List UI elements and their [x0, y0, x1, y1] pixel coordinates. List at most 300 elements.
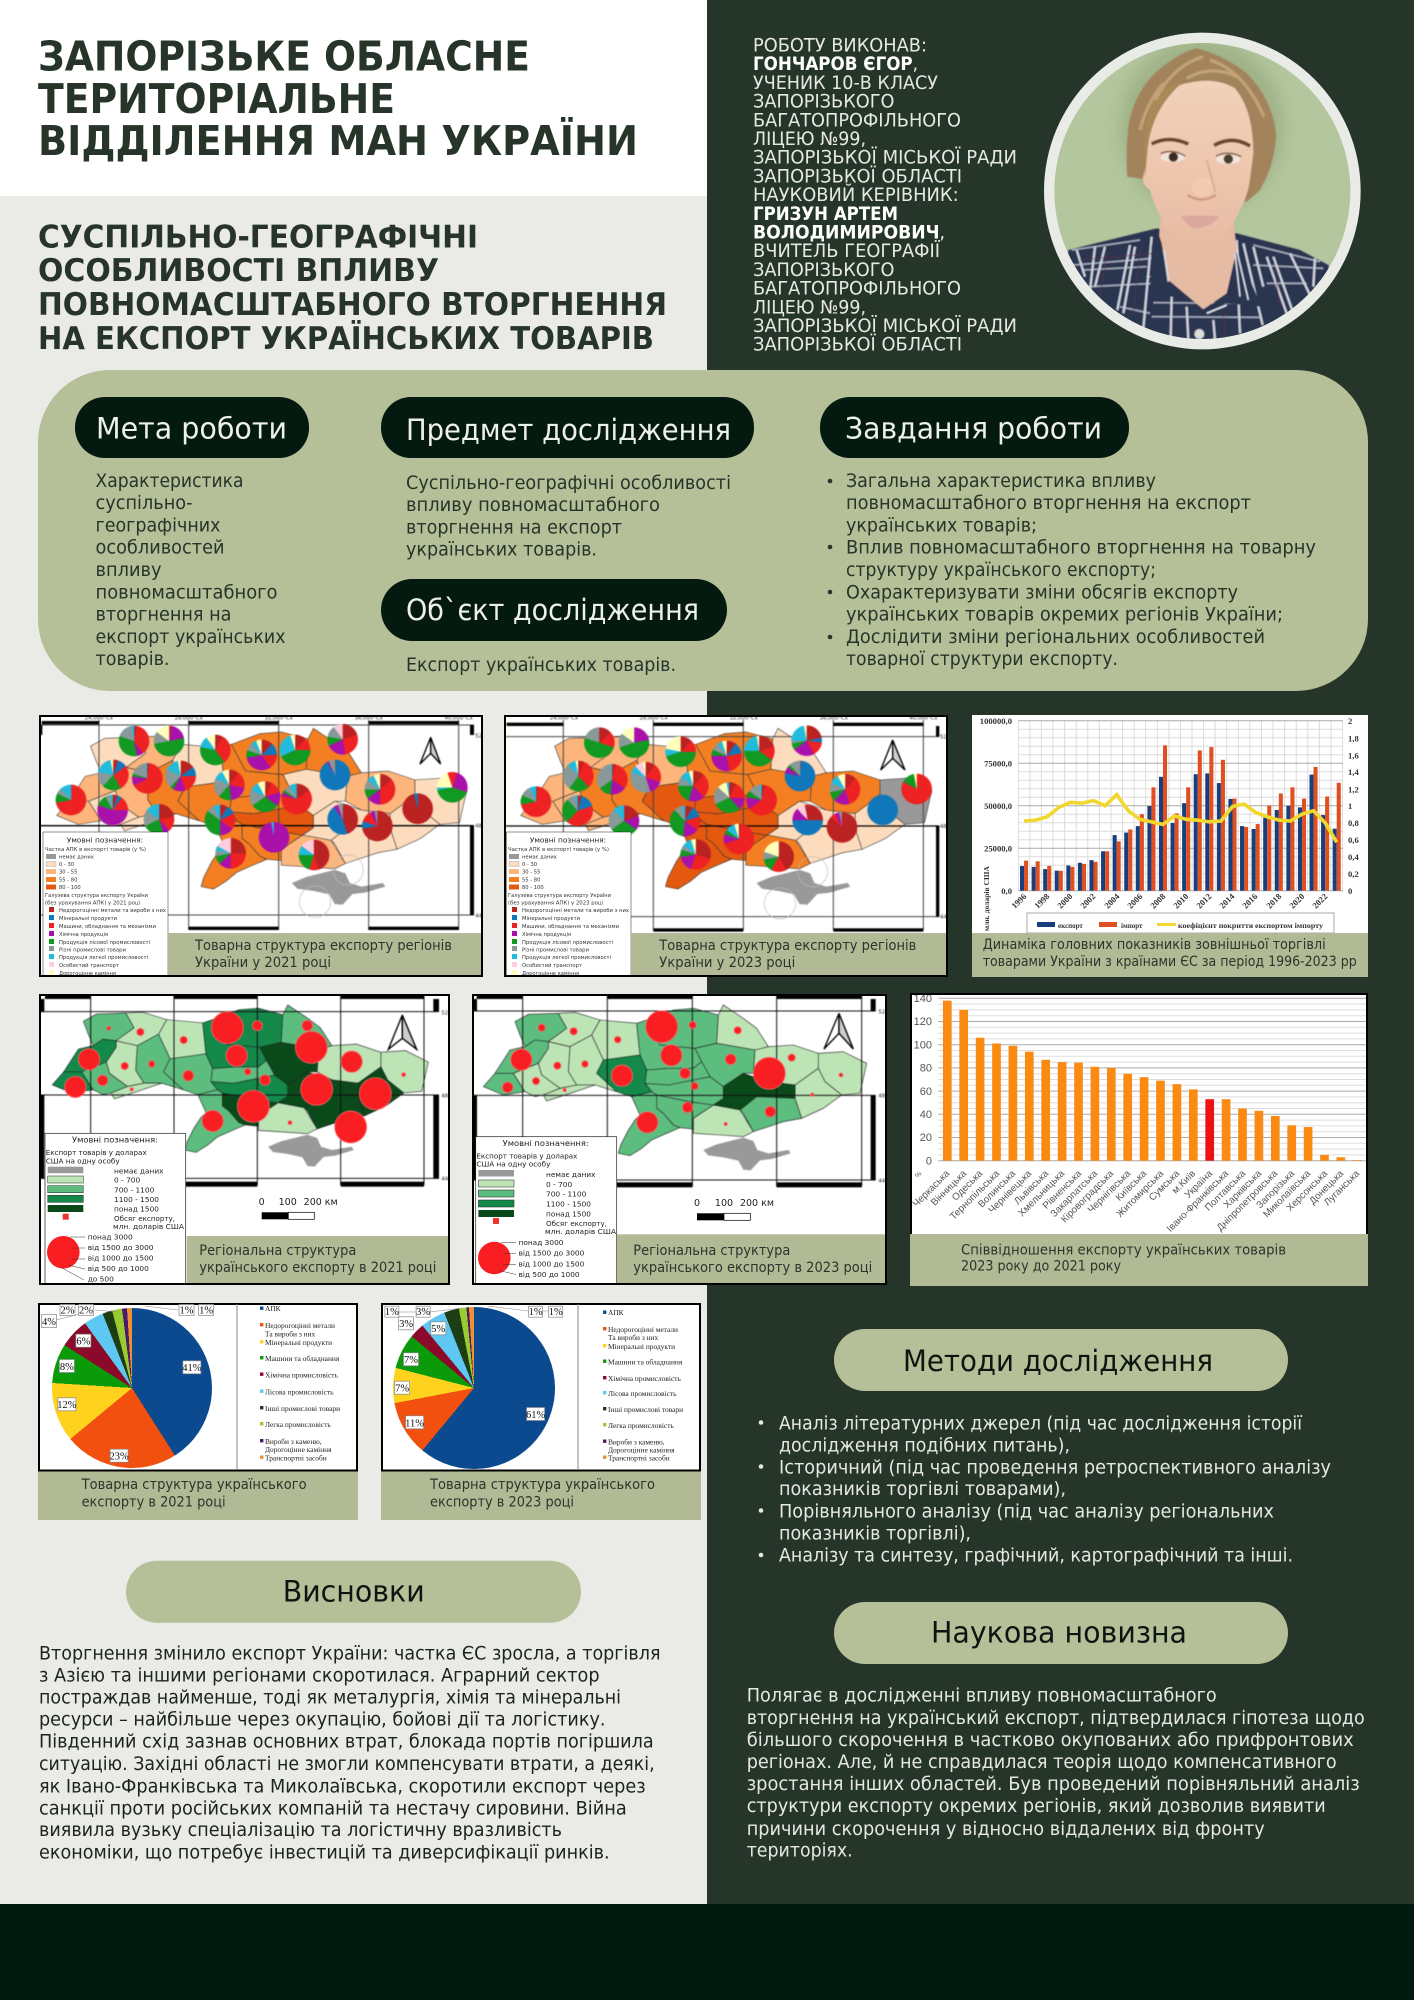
data labels 2023: 11%	[405, 1418, 424, 1430]
text: aim description: особливостей	[96, 536, 224, 558]
legend 2023: Інші промислові товари	[608, 1405, 683, 1414]
legend 2021: Хімічна промисловість	[265, 1370, 338, 1380]
legend 2023: Транспортні засоби	[608, 1454, 670, 1462]
data labels 2021: 2%	[60, 1306, 75, 1316]
text block: conclusions: постраждав найменше, тоді як металургія, хімія та мінеральні	[39, 1686, 621, 1708]
legend: map 2021: Машини, обладнання та механізми	[59, 924, 156, 930]
text: aim description	[96, 470, 286, 670]
data labels 2023: 1%	[529, 1307, 543, 1318]
chart: EU trade dynamics 1996-2023: 0,8	[1348, 818, 1359, 828]
chart: export 2023 vs 2021 by region: 120	[914, 1016, 932, 1028]
legend: export 2021: від 1500 до 3000	[88, 1243, 154, 1252]
legend: export 2023: Експорт товарів у доларах	[476, 1152, 578, 1160]
chart: EU trade dynamics 1996-2023: 2012	[1194, 891, 1213, 911]
text block: scientific novelty: регіонах. Але, й не справдилася теорія щодо компенсативного	[747, 1751, 1337, 1773]
caption: map 2023: Регіональна структура	[633, 1243, 790, 1259]
legend: export 2023: понад 1500	[546, 1210, 591, 1218]
text: subject description: Суспільно-географічні особливості	[406, 472, 731, 494]
legend: map 2023: (без урахування АПК) у 2023 році	[508, 900, 603, 906]
chart: EU trade dynamics 1996-2023: 2004	[1102, 891, 1122, 911]
bars: import	[1024, 745, 1341, 891]
data labels 2023: 7%	[404, 1355, 418, 1366]
legend: export 2023: 0 - 700	[546, 1180, 572, 1189]
legend 2023: Машини та обладнання	[608, 1358, 683, 1366]
text block: authors: БАГАТОПРОФІЛЬНОГО	[753, 110, 961, 131]
legend: export 2023: США на одну особу	[476, 1160, 551, 1169]
list: tasks: Охарактеризувати зміни обсягів експорту	[846, 582, 1238, 604]
chart: export 2023 vs 2021 by region: 140	[914, 993, 932, 1005]
legend 2021: Мінеральні продукти	[265, 1338, 332, 1347]
text: object description: Експорт українських товарів.	[406, 654, 676, 676]
text: subject description: вторгнення на експорт	[406, 516, 622, 538]
legend: trade chart: експорт	[1058, 922, 1083, 930]
map: export structure of regions 2021: 44	[475, 913, 483, 919]
caption: pie 2023: експорту в 2023 році	[430, 1494, 574, 1510]
chart: EU trade dynamics 1996-2023: 50000,0	[984, 801, 1012, 811]
caption: map 2023	[617, 1234, 887, 1284]
chart: export 2023 vs 2021 by region	[910, 993, 1368, 1286]
scale bar 2021: 0	[259, 1197, 265, 1208]
map: export structure of regions 2023: 48	[940, 824, 947, 830]
legend: map 2021: Дорогоцінне каміння	[59, 971, 116, 977]
legend: export 2023: понад 3000	[518, 1238, 564, 1247]
legend 2023: Легка промисловість	[608, 1421, 674, 1430]
chart: export 2023 vs 2021 by region: Сумська	[1147, 1168, 1183, 1203]
chart: export 2023 vs 2021 by region: Миколаївська	[1261, 1168, 1314, 1220]
legend: export 2023: від 500 до 1000	[518, 1270, 580, 1279]
map: export structure of regions 2021: 24,000°Сх	[85, 715, 113, 721]
legend: map 2021: 80 - 100	[59, 885, 81, 891]
list: methods: показників торгівлі),	[779, 1522, 971, 1544]
list: methods	[758, 1412, 1331, 1567]
legend 2023: Та вироби з них	[608, 1333, 659, 1342]
data labels 2023: 1%	[385, 1307, 399, 1318]
legend: map 2021: Галузева структура експорту України	[45, 893, 148, 899]
data labels 2021: 8%	[60, 1362, 74, 1373]
caption: bar chart	[910, 1234, 1368, 1286]
legend: export 2021: від 1000 до 1500	[88, 1254, 154, 1263]
map: regional export 2021	[39, 994, 450, 1285]
text block: authors: ЗАПОРІЗЬКОГО	[753, 92, 894, 113]
chart: EU trade dynamics 1996-2023: 2018	[1264, 891, 1284, 911]
chart: export 2023 vs 2021 by region: Черкаська	[911, 1168, 953, 1210]
text: aim description: повномасштабного	[96, 582, 278, 604]
chart: export 2023 vs 2021 by region: Івано-Франківська	[1165, 1168, 1232, 1235]
text block: conclusions: як Івано-Франківська та Миколаївська, скоротили експорт через	[39, 1775, 646, 1797]
chart: commodity pie 2021	[38, 1303, 358, 1520]
list: tasks: українських товарів;	[846, 514, 1037, 536]
chart: export 2023 vs 2021 by region: Вінницька	[929, 1168, 970, 1208]
data labels 2021: 1%	[199, 1306, 213, 1316]
legend: map 2021	[43, 832, 168, 977]
text: subject description: впливу повномасштабного	[406, 494, 660, 516]
legend: trade chart: коефіцієнт покриття експортом імпорту	[1178, 922, 1324, 930]
chart: EU trade dynamics 1996-2023: млн. доларів США	[982, 866, 991, 931]
data labels 2023: 3%	[399, 1319, 413, 1330]
chart: EU trade dynamics 1996-2023: 100000,0	[980, 716, 1012, 726]
legend 2021: Вироби з каменю,	[265, 1437, 322, 1446]
list: tasks: Вплив повномасштабного вторгнення на товарну	[846, 536, 1316, 558]
text block: authors: ВОЛОДИМИРОВИЧ,	[753, 222, 945, 244]
legend: export 2021: 0 - 700	[114, 1176, 140, 1185]
legend: map 2023: 55 - 80	[522, 878, 540, 884]
data labels 2023: 5%	[431, 1324, 446, 1335]
pill: object: Об`єкт дослідження	[406, 593, 699, 627]
chart: EU trade dynamics 1996-2023: 1,8	[1348, 734, 1359, 744]
chart: export 2023 vs 2021 by region: Київська	[1114, 1168, 1150, 1204]
text block: scientific novelty: причини скорочення у відносно віддалених від фронту	[747, 1818, 1265, 1840]
text: aim description: товарів.	[96, 648, 170, 670]
list: methods: Порівняльного аналізу (під час аналізу регіональних	[779, 1500, 1274, 1522]
legend: map 2021: 0 - 30	[59, 862, 74, 868]
pill: tasks	[820, 397, 1129, 458]
legend: export 2021: немає даних	[114, 1166, 164, 1175]
caption: map 2021: Товарна структура експорту регіонів	[194, 938, 452, 954]
legend 2023: Дорогоцінне каміння	[608, 1446, 675, 1454]
legend: export 2021: 700 - 1100	[114, 1185, 155, 1194]
text: aim description: вторгнення на	[96, 604, 232, 626]
map: export structure of regions 2021	[39, 715, 483, 977]
chart: export 2023 vs 2021 by region: Чернігівська	[1086, 1168, 1134, 1216]
list: tasks	[828, 470, 1316, 670]
legend: map 2023: Машини, обладнання та механізми	[522, 924, 619, 930]
map: regional export 2023	[472, 994, 887, 1285]
legend: map 2021: 55 - 80	[59, 878, 77, 884]
caption: bar chart: Співвідношення експорту українських товарів	[961, 1242, 1286, 1258]
legend: export 2023: млн. доларів США	[545, 1227, 616, 1236]
chart: export 2023 vs 2021 by region: Дніпропетровська	[1215, 1168, 1281, 1234]
map: export structure of regions 2023: 44	[940, 915, 947, 921]
legend: export 2021: 1100 - 1500	[114, 1195, 159, 1204]
legend: map 2023: Продукція легкої промисловості	[522, 955, 611, 961]
legend 2023	[603, 1308, 683, 1462]
legend: export 2021: до 500	[88, 1275, 114, 1284]
map: export structure of regions 2021: 40,000°Сх	[445, 715, 473, 721]
heading: research topic: СУСПІЛЬНО-ГЕОГРАФІЧНІ	[38, 220, 478, 256]
legend: map 2023: Недорогоцінні метали та вироби з них	[522, 908, 629, 914]
legend 2023: АПК	[608, 1308, 624, 1317]
text block: conclusions: виявила вузьку спеціалізацію та логістичну вразливість	[39, 1819, 562, 1841]
text block: scientific novelty: Полягає в дослідженні впливу повномасштабного	[747, 1685, 1217, 1707]
chart: EU trade dynamics 1996-2023: 2016	[1240, 891, 1260, 911]
background: white header block	[0, 0, 707, 196]
legend: export 2023	[476, 1137, 617, 1284]
text block: authors: ЗАПОРІЗЬКОЇ ОБЛАСТІ	[753, 335, 962, 356]
legend: export 2023: немає даних	[546, 1170, 596, 1179]
legend: map 2021: Недорогоцінні метали та вироби з них	[59, 908, 166, 914]
data labels 2021: 23%	[109, 1452, 129, 1462]
line: coverage coefficient	[1024, 795, 1337, 842]
chart: export 2023 vs 2021 by region: Львівська	[1012, 1168, 1052, 1207]
chart: EU trade dynamics 1996-2023: 2006	[1125, 891, 1145, 911]
list: methods: дослідження подібних питань),	[779, 1434, 1070, 1456]
pie charts on 2021 map	[54, 723, 468, 872]
legend: map 2023: Різні промислові товари	[522, 948, 589, 954]
legend 2021: Та вироби з них	[265, 1330, 316, 1338]
legend: trade chart: імпорт	[1121, 922, 1143, 930]
chart: EU trade dynamics 1996-2023: 0	[1348, 886, 1352, 896]
chart: EU trade dynamics 1996-2023: 1,4	[1348, 767, 1359, 777]
caption: pie 2023	[429, 1477, 655, 1510]
pill: tasks: Завдання роботи	[845, 412, 1102, 446]
data labels 2021: 1%	[180, 1306, 194, 1316]
legend: map 2023: 30 - 55	[522, 870, 540, 876]
scale bar 2023: 100	[715, 1198, 733, 1209]
chart: export 2023 vs 2021 by region: Луганська	[1322, 1168, 1363, 1208]
legend: map 2023: 0 - 30	[522, 862, 537, 868]
map: export structure of regions 2021: 48	[475, 823, 483, 829]
text block: authors: РОБОТУ ВИКОНАВ:	[753, 36, 927, 56]
caption: bar chart: 2023 року до 2021 року	[961, 1259, 1121, 1275]
text block: conclusions: з Азією та іншими регіонами скоротилася. Аграрний сектор	[39, 1665, 600, 1687]
caption: map 2021: України у 2021 році	[195, 955, 331, 971]
caption: map 2021	[187, 1236, 450, 1285]
legend: map 2023: Мінеральні продукти	[522, 916, 580, 922]
map: export structure of regions 2021: 36,000°Сх	[355, 715, 383, 721]
chart: EU trade dynamics 1996-2023: 2002	[1078, 891, 1097, 911]
chart: export 2023 vs 2021 by region: %	[914, 1170, 923, 1180]
map: export structure of regions 2021: 32,000°Сх	[265, 715, 293, 721]
chart: export 2023 vs 2021 by region: Полтавська	[1203, 1168, 1249, 1214]
text: subject description	[406, 472, 731, 560]
legend: map 2023: Особистий транспорт	[522, 962, 582, 969]
list: tasks: українських товарів окремих регіонів України;	[846, 604, 1283, 626]
legend 2021: Транспортні засоби	[265, 1454, 327, 1462]
list: methods: показників торгівлі товарами),	[779, 1478, 1066, 1500]
legend 2023: Лісова промисловість	[608, 1389, 677, 1398]
heading: conclusions: Висновки	[283, 1575, 425, 1609]
text block: authors: ЗАПОРІЗЬКОЇ МІСЬКОЇ РАДИ	[753, 316, 1017, 337]
data labels 2023	[385, 1306, 563, 1430]
background: dark bottom band	[0, 1904, 1414, 2000]
data labels 2021: 6%	[76, 1336, 91, 1348]
list: methods: Аналіз літературних джерел (під час дослідження історії	[779, 1412, 1303, 1434]
caption: map 2023: Товарна структура експорту регіонів	[658, 938, 916, 954]
legend: map 2023: 80 - 100	[522, 885, 544, 891]
text block: scientific novelty: територіях.	[747, 1840, 853, 1862]
legend: export 2021: понад 3000	[88, 1232, 133, 1241]
text: aim description: експорт українських	[96, 626, 286, 648]
heading: methods: Методи дослідження	[903, 1344, 1213, 1378]
text block: authors: ВЧИТЕЛЬ ГЕОГРАФІЇ	[753, 241, 941, 262]
map: export structure of regions 2023	[504, 715, 948, 977]
pill: subject: Предмет дослідження	[406, 413, 731, 447]
title: organisation heading: ЗАПОРІЗЬКЕ ОБЛАСНЕ	[38, 32, 530, 80]
text block: authors	[753, 36, 1017, 356]
list: tasks: повномасштабного вторгнення на експорт	[846, 492, 1251, 514]
chart: export 2023 vs 2021 by region: Кіровоградська	[1059, 1168, 1117, 1225]
map: regional export 2023: 52	[878, 1010, 885, 1016]
chart: EU trade dynamics 1996-2023: 0,4	[1348, 852, 1359, 862]
pill: object	[381, 579, 727, 641]
background: dark right column	[707, 0, 1414, 1904]
legend: export 2021: США на одну особу	[46, 1156, 120, 1165]
scale bar 2021	[259, 1197, 338, 1219]
chart: EU trade dynamics 1996-2023: 0,0	[1001, 886, 1012, 896]
map: export structure of regions 2023: 28,000°Сх	[640, 715, 668, 721]
chart: export 2023 vs 2021 by region: Херсонська	[1285, 1168, 1331, 1214]
text block: authors: ГОНЧАРОВ ЄГОР,	[753, 54, 918, 75]
data labels 2023: 3%	[416, 1307, 430, 1318]
bars: regions	[943, 1001, 1362, 1161]
text: aim description: суспільно-	[96, 492, 192, 514]
caption: pie 2021: Товарна структура українського	[81, 1477, 307, 1493]
caption: pie 2021: експорту в 2021 році	[82, 1494, 226, 1510]
legend: export 2021: понад 1500	[114, 1205, 159, 1214]
data labels 2023: 61%	[526, 1410, 545, 1421]
map: export structure of regions 2021: 52	[475, 733, 482, 739]
chart: export 2023 vs 2021 by region: 40	[920, 1109, 932, 1121]
chart: EU trade dynamics 1996-2023: 0,2	[1348, 869, 1359, 879]
chart: export 2023 vs 2021 by region: Тернопільська	[948, 1168, 1003, 1222]
text block: authors: ЗАПОРІЗЬКОЇ МІСЬКОЇ РАДИ	[753, 148, 1017, 169]
legend 2021: Недорогоцінні метали	[265, 1321, 335, 1330]
text block: conclusions: економіки, що потребує інвестицій та диверсифікації ринків.	[39, 1841, 610, 1863]
chart: export 2023 vs 2021 by region: 100	[914, 1040, 932, 1052]
chart: EU trade dynamics 1996-2023	[972, 715, 1368, 977]
legend: map 2021: Продукція лісової промисловості	[59, 940, 150, 946]
text block: authors: ЗАПОРІЗЬКОГО	[753, 260, 894, 281]
caption: pie 2021	[81, 1477, 307, 1510]
map: export structure of regions 2023: 36,000°Сх	[820, 715, 848, 721]
legend: export 2021: від 500 до 1000	[88, 1264, 149, 1273]
legend: map 2023: Дорогоцінне каміння	[522, 971, 579, 977]
legend: map 2023: Галузева структура експорту України	[508, 893, 611, 899]
text block: conclusions: ресурси – найбільше через окупацію, бойові дії та логістику.	[39, 1708, 606, 1730]
chart: EU trade dynamics 1996-2023: 2000	[1055, 891, 1074, 911]
legend 2021: Машини та обладнання	[265, 1354, 340, 1363]
heading: research topic: ПОВНОМАСШТАБНОГО ВТОРГНЕННЯ	[38, 287, 667, 323]
legend: map 2021: Особистий транспорт	[59, 962, 119, 969]
legend: map 2021: Продукція легкої промисловості	[59, 955, 148, 961]
list: methods: Аналізу та синтезу, графічний, картографічний та інші.	[779, 1545, 1293, 1567]
legend: map 2021: Мінеральні продукти	[59, 916, 117, 922]
chart: EU trade dynamics 1996-2023: 2	[1348, 716, 1352, 726]
scale bar 2023: 0	[694, 1198, 700, 1209]
caption: map 2021	[168, 933, 483, 977]
legend: map 2023: немає даних	[522, 854, 557, 860]
list: tasks: Дослідити зміни регіональних особливостей	[846, 626, 1265, 648]
data labels 2021: 2%	[79, 1306, 93, 1316]
legend: export 2021: млн. доларів США	[113, 1222, 184, 1231]
map: export structure of regions 2023: 32,000°Сх	[730, 715, 758, 721]
text block: scientific novelty: структури експорту окремих регіонів, який дозволив виявити	[747, 1795, 1326, 1817]
data labels 2021: 4%	[42, 1317, 56, 1328]
legend: map 2023: Умовні позначення:	[530, 836, 606, 844]
legend: export 2021: Умовні позначення:	[72, 1136, 158, 1145]
text: aim description: географічних	[96, 514, 220, 536]
text: subject description: українських товарів.	[406, 538, 597, 560]
caption: pie 2023: Товарна структура українського	[429, 1477, 655, 1493]
map: export structure of regions 2023: 24,000°Сх	[550, 715, 578, 721]
chart: EU trade dynamics 1996-2023: 1996	[1009, 891, 1029, 911]
caption: trade chart: Динаміка головних показників зовнішньої торгівлі	[983, 937, 1326, 953]
text block: authors: ЗАПОРІЗЬКОЇ ОБЛАСТІ	[753, 166, 962, 187]
chart: export 2023 vs 2021 by region: 60	[920, 1086, 932, 1098]
map: export structure of regions 2023: 40,000°Сх	[909, 715, 937, 721]
legend: export 2021: Обсяг експорту,	[114, 1214, 175, 1223]
scale bar 2023	[694, 1198, 774, 1220]
chart: EU trade dynamics 1996-2023: 2020	[1287, 891, 1306, 911]
heading: scientific novelty: Наукова новизна	[931, 1616, 1187, 1650]
chart: export 2023 vs 2021 by region: м.Київ	[1170, 1168, 1198, 1196]
title: organisation heading: ТЕРИТОРІАЛЬНЕ	[38, 75, 395, 123]
text: aim description: впливу	[96, 559, 162, 581]
map: regional export 2021: 48	[441, 1093, 449, 1099]
chart: export 2023 vs 2021 by region: Донецька	[1307, 1168, 1347, 1207]
text block: authors: БАГАТОПРОФІЛЬНОГО	[753, 279, 961, 300]
legend: map 2021: Частка АПК в експорті товарів (у %)	[45, 847, 146, 853]
list: tasks: товарної структури експорту.	[846, 648, 1118, 670]
panel: goals and tasks	[38, 370, 1368, 691]
data labels 2023: 7%	[395, 1384, 409, 1394]
heading: research topic: ОСОБЛИВОСТІ ВПЛИВУ	[38, 253, 439, 289]
map: regional export 2021: 44	[441, 1176, 449, 1182]
legend 2021: Легка промисловість	[265, 1420, 331, 1429]
legend: map 2023	[506, 832, 631, 977]
text block: authors: ЛІЦЕЮ №99,	[753, 297, 866, 318]
chart: export 2023 vs 2021 by region: Житомирська	[1115, 1168, 1167, 1220]
legend: map 2023: Частка АПК в експорті товарів (у %)	[508, 847, 609, 853]
text block: authors: ЛІЦЕЮ №99,	[753, 129, 866, 150]
chart: export 2023 vs 2021 by region: Рівненська	[1041, 1168, 1085, 1212]
data labels 2021	[42, 1304, 214, 1462]
legend 2021: Лісова промисловість	[265, 1388, 334, 1396]
legend: map 2023: Продукція лісової промисловості	[522, 940, 613, 946]
export volume circles 2023	[502, 1011, 843, 1133]
map: regional export 2023: 48	[878, 1094, 886, 1100]
chart: export 2023 vs 2021 by region: 0	[926, 1156, 932, 1168]
legend: map 2021: Умовні позначення:	[67, 836, 143, 844]
legend: map 2023: Хімічна продукція	[522, 932, 571, 938]
legend 2021: Дорогоцінне каміння	[265, 1445, 332, 1454]
heading: conclusions	[126, 1560, 581, 1623]
chart: EU trade dynamics 1996-2023: 1,6	[1348, 750, 1359, 760]
legend 2023: Хімічна промисловість	[608, 1374, 681, 1383]
legend: export 2023: від 1500 до 3000	[518, 1248, 585, 1258]
legend: map 2021: Хімічна продукція	[59, 932, 108, 938]
scale bar 2021: 100	[279, 1197, 297, 1208]
chart: export 2023 vs 2021 by region: Хмельницька	[1016, 1168, 1068, 1219]
chart: export 2023 vs 2021 by region: Харківська	[1222, 1168, 1265, 1211]
legend: map 2021: Різні промислові товари	[59, 948, 126, 954]
legend: export 2021: Експорт товарів у доларах	[46, 1148, 147, 1157]
chart: EU trade dynamics 1996-2023: 25000,0	[984, 844, 1012, 854]
legend: map 2021: немає даних	[59, 854, 94, 860]
pill: aim: Мета роботи	[96, 412, 287, 446]
chart: export 2023 vs 2021 by region: Запорізька	[1254, 1168, 1298, 1211]
legend: export 2023: Умовні позначення:	[503, 1139, 589, 1148]
text block: scientific novelty	[747, 1685, 1365, 1862]
chart: EU trade dynamics 1996-2023: 1998	[1032, 891, 1052, 911]
caption: map 2023	[631, 933, 948, 977]
legend 2023: Вироби з каменю,	[608, 1438, 665, 1446]
heading: methods	[834, 1329, 1288, 1391]
list: tasks: структуру українського експорту;	[846, 559, 1156, 581]
chart: EU trade dynamics 1996-2023: 75000,0	[984, 758, 1012, 768]
heading: scientific novelty	[834, 1602, 1288, 1664]
caption: map 2023: України у 2023 році	[659, 955, 795, 971]
caption: map 2021: Регіональна структура	[199, 1243, 356, 1259]
title: organisation heading	[38, 32, 638, 165]
chart: export 2023 vs 2021 by region: Закарпатська	[1049, 1168, 1101, 1220]
pie charts on 2023 map	[520, 724, 933, 873]
text: aim description: Характеристика	[96, 470, 244, 492]
chart: EU trade dynamics 1996-2023: 1,2	[1348, 784, 1359, 794]
chart: EU trade dynamics 1996-2023: 2014	[1217, 891, 1237, 911]
map: export structure of regions 2021: 28,000°Сх	[175, 715, 203, 721]
legend: map 2021: 30 - 55	[59, 870, 77, 876]
